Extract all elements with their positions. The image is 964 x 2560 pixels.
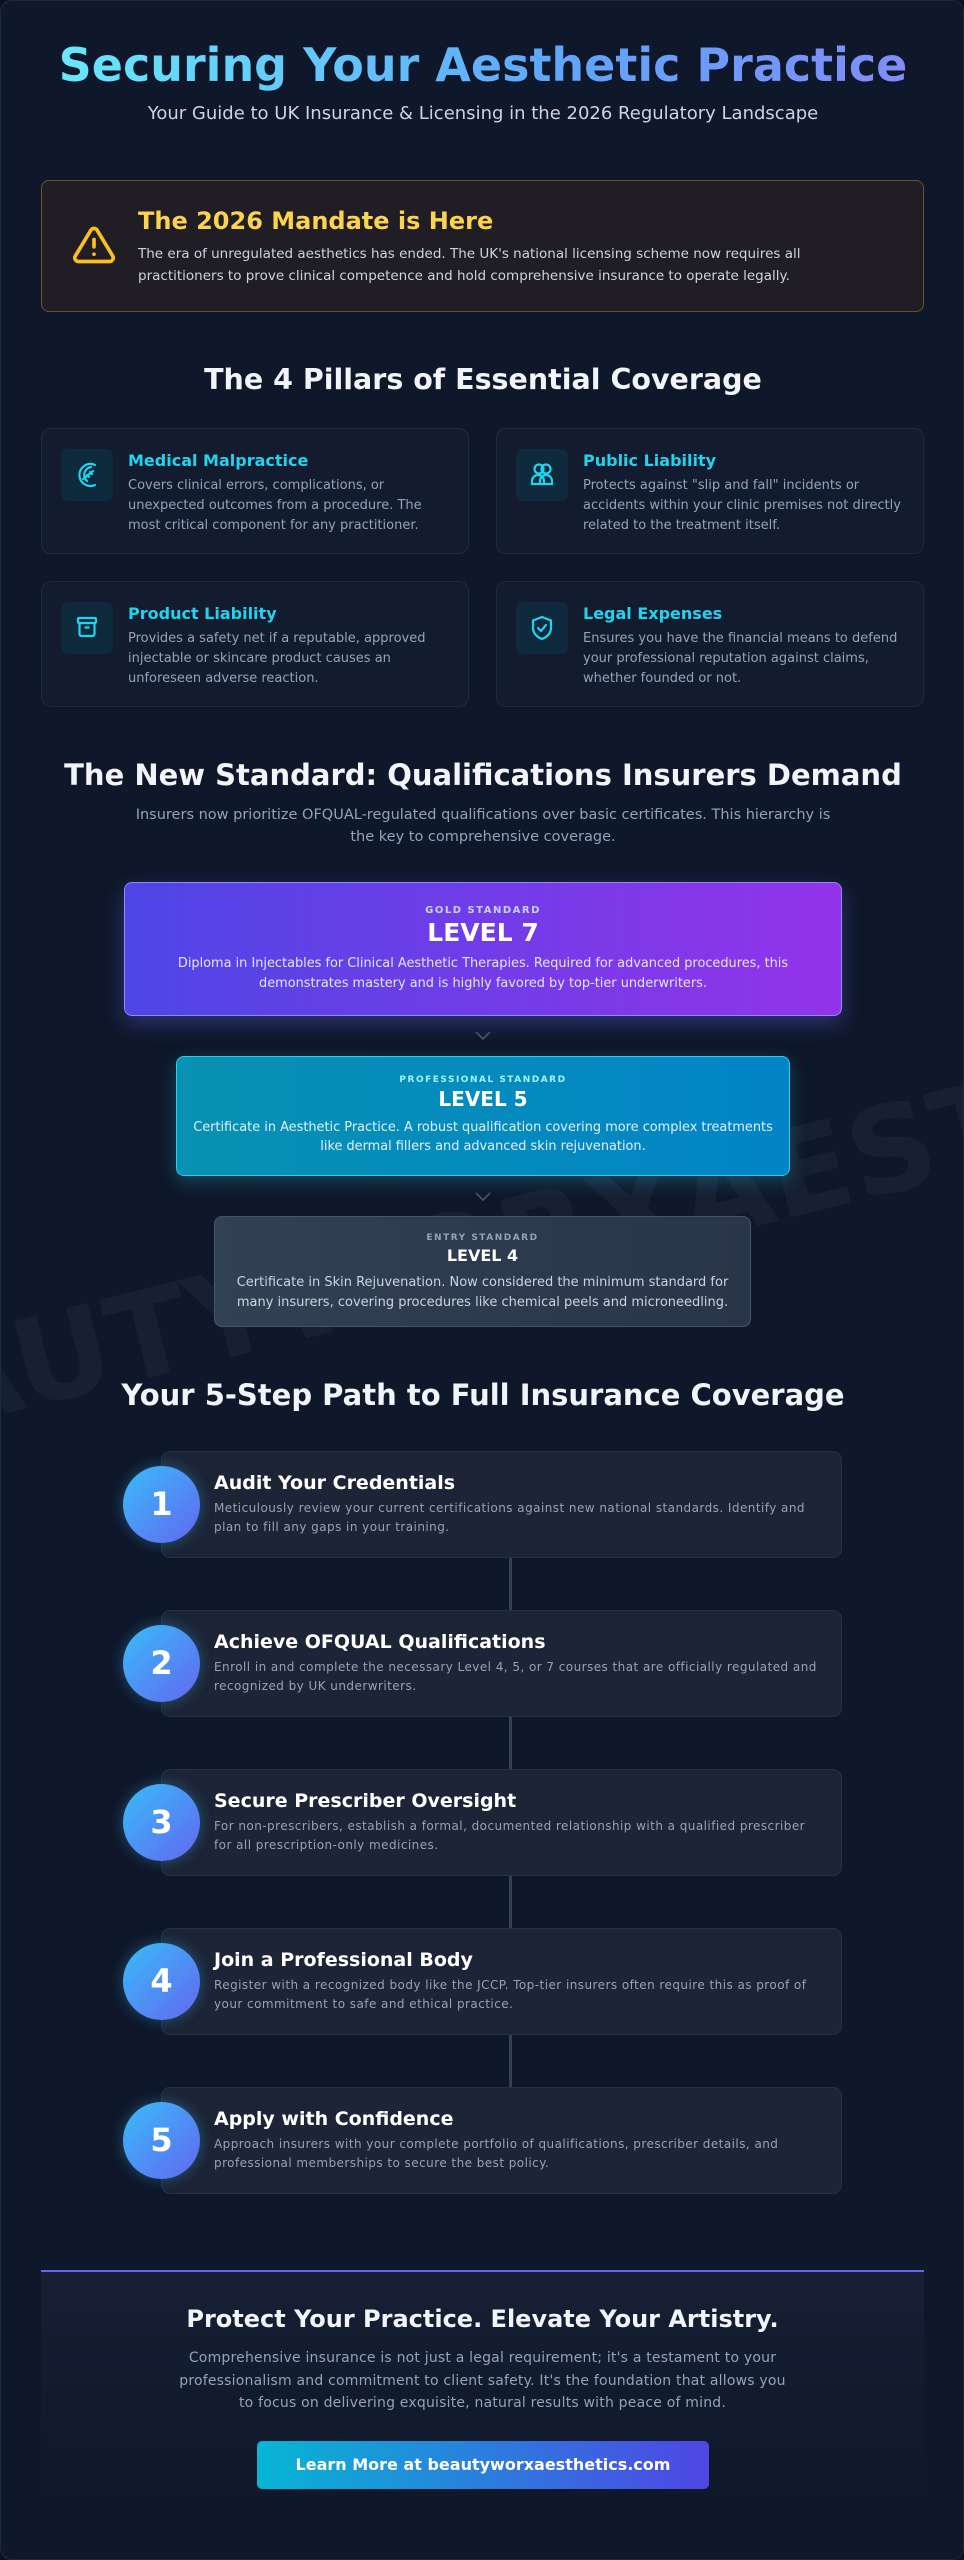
panel: product liability: Provides a safety net if a reputable, approved injectable or skincare product causes an unforeseen adverse reaction.	[128, 631, 425, 686]
icon: warning	[72, 226, 116, 264]
panel: mandate alert	[41, 180, 924, 312]
title: Securing Your Aesthetic Practice	[59, 38, 907, 92]
panel: medical malpractice: Covers clinical errors, complications, or unexpected outcomes from a procedure. The most critical component for any practitioner.	[128, 478, 422, 533]
subtitle: Your Guide to UK Insurance & Licensing in the 2026 Regulatory Landscape	[148, 103, 818, 124]
panel: level 7: LEVEL 7	[427, 918, 539, 947]
step 1: 1	[150, 1485, 173, 1523]
footer heading: Protect Your Practice. Elevate Your Artistry.	[186, 2305, 779, 2333]
step 3	[161, 1769, 842, 1876]
panel: level 5: Certificate in Aesthetic Practice. A robust qualification covering more complex treatments like dermal fillers and advanced skin rejuvenation.	[193, 1120, 773, 1154]
panel: level 7: Diploma in Injectables for Clinical Aesthetic Therapies. Required for advanced procedures, this demonstrates mastery and is highly favored by top-tier underwriters.	[178, 956, 788, 991]
panel: legal expenses	[496, 581, 924, 707]
footer text: Comprehensive insurance is not just a legal requirement; it's a testament to your professionalism and commitment to client safety. It's the foundation that allows you to focus on delivering exquisite, natural results with peace of mind.	[179, 2350, 786, 2411]
step 5	[161, 2087, 842, 2194]
step 1: Meticulously review your current certifications against new national standards. Identify and plan to fill any gaps in your training.	[214, 1501, 805, 1534]
panel: product liability: Product Liability	[128, 604, 277, 623]
panel: level 5	[176, 1056, 790, 1176]
heading: 5-step path: Your 5-Step Path to Full Insurance Coverage	[121, 1378, 845, 1412]
text: qualifications intro: Insurers now prioritize OFQUAL-regulated qualifications over basic certificates. This hierarchy is the key to comprehensive coverage.	[136, 807, 830, 845]
step 5: Apply with Confidence	[214, 2108, 453, 2130]
step 2: 2	[150, 1644, 173, 1682]
panel: level 7: GOLD STANDARD	[425, 905, 541, 916]
icon: people	[516, 449, 568, 501]
step 4	[161, 1928, 842, 2035]
step 3: For non-prescribers, establish a formal, documented relationship with a qualified prescriber for all prescription-only medicines.	[214, 1819, 805, 1852]
step 4: 4	[150, 1962, 173, 2000]
heading: new standard: The New Standard: Qualifications Insurers Demand	[64, 758, 902, 792]
arrow: chevron	[476, 1032, 490, 1040]
panel: product liability	[41, 581, 469, 707]
panel: medical malpractice: Medical Malpractice	[128, 451, 308, 470]
button	[257, 2441, 709, 2489]
step 4: Join a Professional Body	[214, 1949, 473, 1971]
step 3: 3	[150, 1803, 173, 1841]
step 2: Enroll in and complete the necessary Level 4, 5, or 7 courses that are officially regulated and recognized by UK underwriters.	[214, 1660, 817, 1693]
step 5: 5	[150, 2121, 173, 2159]
step 3: Secure Prescriber Oversight	[214, 1790, 516, 1812]
panel: legal expenses: Legal Expenses	[583, 604, 722, 623]
icon: shield	[516, 602, 568, 654]
icon: box	[61, 602, 113, 654]
arrow: chevron	[476, 1192, 490, 1201]
panel: level 5: PROFESSIONAL STANDARD	[399, 1075, 567, 1085]
panel: level 4: Certificate in Skin Rejuvenation. Now considered the minimum standard for many insurers, covering procedures like chemical peels and microneedling.	[237, 1275, 728, 1310]
step 4: Register with a recognized body like the JCCP. Top-tier insurers often require this as proof of your commitment to safe and ethical practice.	[214, 1978, 806, 2011]
mandate text: The era of unregulated aesthetics has ended. The UK's national licensing scheme now requires all practitioners to prove clinical competence and hold comprehensive insurance to operate legally.	[138, 246, 800, 284]
heading: 4 pillars: The 4 Pillars of Essential Coverage	[204, 363, 762, 396]
panel: level 7	[124, 882, 842, 1016]
icon: medical	[61, 449, 113, 501]
step 1: Audit Your Credentials	[214, 1472, 455, 1494]
step 2: Achieve OFQUAL Qualifications	[214, 1631, 546, 1653]
panel: level 5: LEVEL 5	[438, 1087, 528, 1111]
panel: footer CTA	[41, 2270, 924, 2505]
panel: medical malpractice	[41, 428, 469, 554]
step 1	[161, 1451, 842, 1558]
mandate heading: The 2026 Mandate is Here	[138, 207, 493, 235]
panel: level 4: LEVEL 4	[447, 1246, 518, 1265]
panel: level 4: ENTRY STANDARD	[426, 1233, 539, 1243]
panel: legal expenses: Ensures you have the financial means to defend your professional reputation against claims, whether founded or not.	[583, 631, 897, 686]
panel: public liability	[496, 428, 924, 554]
step 5: Approach insurers with your complete portfolio of qualifications, prescriber details, and professional memberships to secure the best policy.	[214, 2137, 778, 2170]
panel: level 4	[214, 1216, 751, 1327]
button: Learn More at beautyworxaesthetics.com	[296, 2455, 670, 2474]
panel: public liability: Protects against "slip and fall" incidents or accidents within your clinic premises not directly related to the treatment itself.	[583, 478, 901, 533]
step 2	[161, 1610, 842, 1717]
panel: public liability: Public Liability	[583, 451, 716, 470]
